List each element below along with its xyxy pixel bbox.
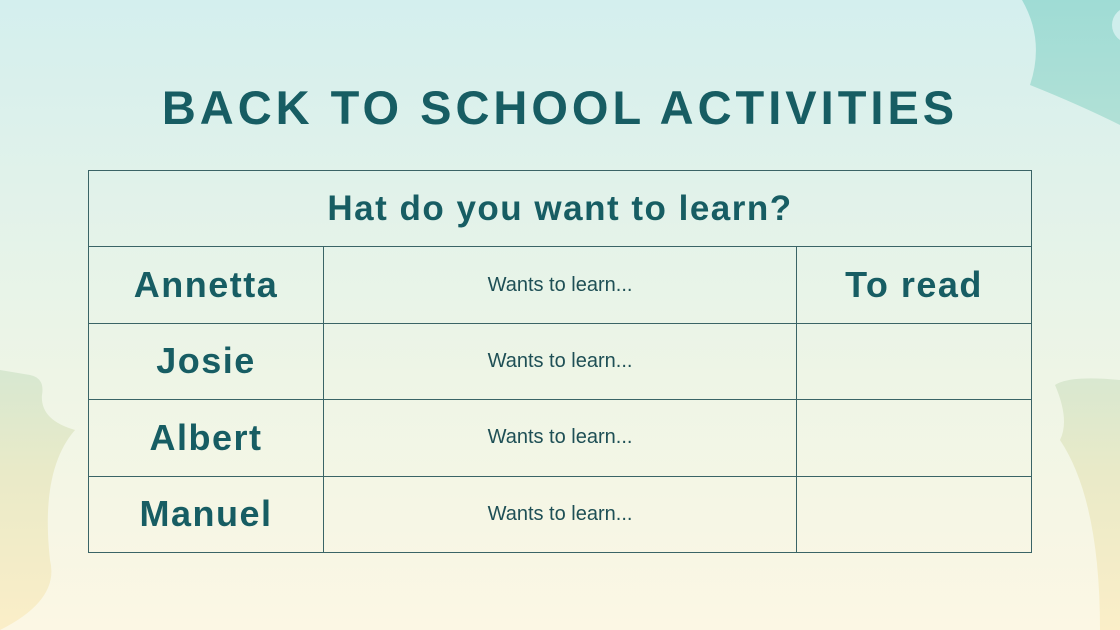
table header: Hat do you want to learn?: [327, 189, 793, 228]
row: Manuel: Wants to learn...: [488, 503, 632, 525]
row: Albert: Wants to learn...: [488, 426, 632, 448]
row: Annetta: Annetta: [134, 264, 278, 305]
row: Josie: [156, 340, 632, 381]
row: Josie: Josie: [156, 340, 256, 381]
table: [88, 170, 1032, 553]
row: Albert: Albert: [149, 417, 262, 458]
row: Albert: [149, 417, 632, 458]
row: Manuel: [139, 493, 632, 534]
row: Annetta: To read: [845, 264, 983, 305]
title: BACK TO SCHOOL ACTIVITIES: [162, 81, 958, 134]
row: Annetta: Wants to learn...: [488, 274, 632, 296]
table header: [134, 189, 983, 534]
row: Annetta: [134, 264, 983, 305]
row: Manuel: Manuel: [139, 493, 272, 534]
row: Josie: Wants to learn...: [488, 350, 632, 372]
